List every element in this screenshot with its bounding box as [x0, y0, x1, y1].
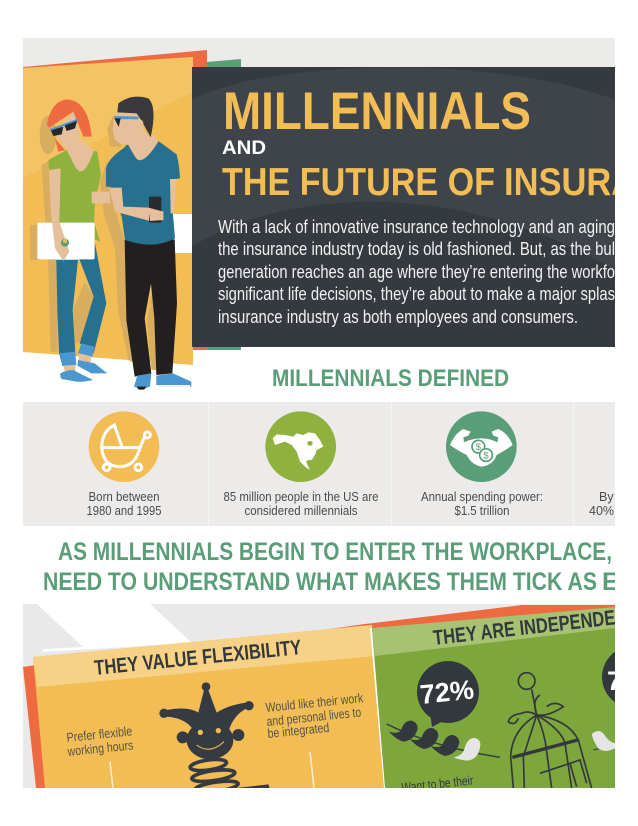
- callout: 72 percent: 72%: [418, 674, 475, 710]
- callout: second percent: [602, 652, 615, 702]
- leader line right: [310, 752, 314, 788]
- text: born between: 1980 and 1995: [86, 504, 162, 518]
- text: fourth stat: 40% of: [589, 504, 628, 518]
- band: white statement: [23, 526, 615, 604]
- title: millennials: MILLENNIALS: [223, 82, 531, 141]
- heading: millennials defined: MILLENNIALS DEFINED: [272, 365, 509, 392]
- intro paragraph: [218, 217, 615, 327]
- title: the future of: THE FUTURE OF: [222, 161, 495, 204]
- panel: they value flexibility: [33, 625, 385, 794]
- icon: birdcage: [508, 673, 592, 788]
- ribbon: orange accents: [23, 605, 615, 788]
- icon: birds on wire: [387, 721, 500, 761]
- text: 85 million: [224, 492, 378, 515]
- text: spending power: Annual spending power:: [421, 490, 543, 504]
- heading: flexibility: THEY VALUE FLEXIBILITY: [93, 636, 302, 680]
- icon: north america map: [265, 411, 336, 482]
- panel: millennials defined band: [23, 402, 628, 526]
- text: fourth stat: [589, 492, 614, 515]
- panel: accent ribbons behind header: [23, 50, 241, 352]
- text: 85 million: 85 million people in the US are: [224, 490, 379, 504]
- text: work and personal lives: and personal lives to: [266, 704, 362, 729]
- heading: cut-off letter: E: [602, 568, 619, 596]
- text: prefer flexible: Prefer flexible: [66, 723, 133, 745]
- panel: dark header: [192, 67, 638, 347]
- text: fourth stat: By: [599, 490, 614, 504]
- panel: yellow illustration background: [23, 57, 193, 365]
- text: spending power: $1.5 trillion: [454, 504, 510, 518]
- illustration: woman and man: [30, 97, 191, 390]
- icon: flexing arms with coins: $: [476, 442, 482, 452]
- title: and: AND: [222, 138, 266, 159]
- icon: flexing arms with coins: [446, 411, 517, 482]
- divider between panels: [370, 628, 386, 788]
- callout: second percent: 7: [607, 666, 622, 696]
- icon: flexing arms with coins: $: [483, 450, 489, 460]
- text: want to be their: Want to be their: [401, 772, 474, 795]
- text: born between: [87, 492, 161, 515]
- section background: [23, 604, 615, 788]
- panel: they are independent: [372, 607, 615, 788]
- text: work and personal lives: be integrated: [267, 720, 330, 741]
- text: spending power: [421, 492, 542, 516]
- callout: 72 percent: [417, 661, 479, 727]
- text: work and personal lives: Would like their work: [265, 690, 364, 715]
- text: born between: Born between: [88, 490, 160, 504]
- icon: baby stroller: [89, 411, 159, 482]
- leader line left: [110, 762, 113, 788]
- icon: jester on spring: [159, 682, 270, 794]
- text: work and personal lives: [265, 693, 364, 738]
- text: prefer flexible: working hours: [66, 737, 134, 759]
- text: prefer flexible: [67, 726, 134, 756]
- icon: white bird right: [592, 731, 615, 751]
- text: 85 million: considered millennials: [244, 504, 358, 518]
